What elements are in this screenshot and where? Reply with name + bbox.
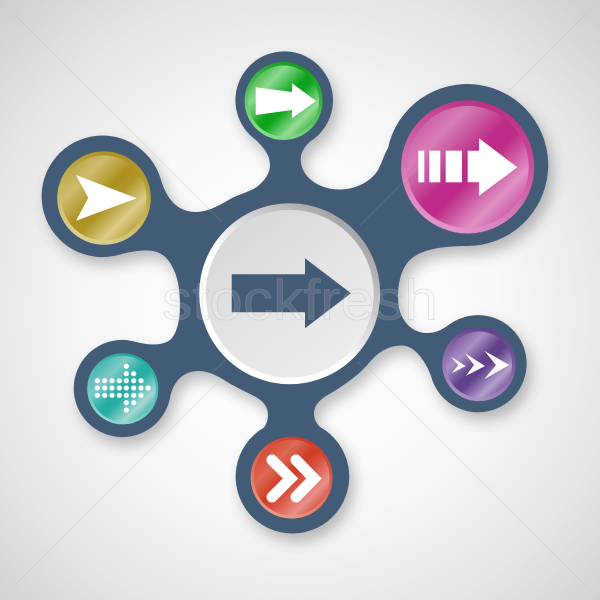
watermark: stockfresh [162, 268, 438, 332]
icon: center arrow [232, 258, 351, 328]
button: right purple [442, 328, 516, 401]
icon: red double chevron [272, 460, 314, 497]
icon: green arrow [256, 83, 316, 118]
connector shape [42, 51, 548, 533]
icon: gold arrowhead [76, 175, 137, 221]
button: left gold [57, 151, 151, 245]
icon: teal dotted arrow [95, 364, 151, 413]
button: bottom red [251, 437, 333, 519]
connector shadow [47, 59, 553, 541]
button: top green [245, 62, 323, 140]
icon: magenta striped arrow [418, 138, 517, 196]
button: right magenta [401, 100, 534, 234]
button: bottom left teal [87, 353, 158, 424]
icon: purple chevrons [451, 351, 509, 379]
center button [199, 203, 380, 384]
watermark diagonals on shape [150, 150, 440, 440]
